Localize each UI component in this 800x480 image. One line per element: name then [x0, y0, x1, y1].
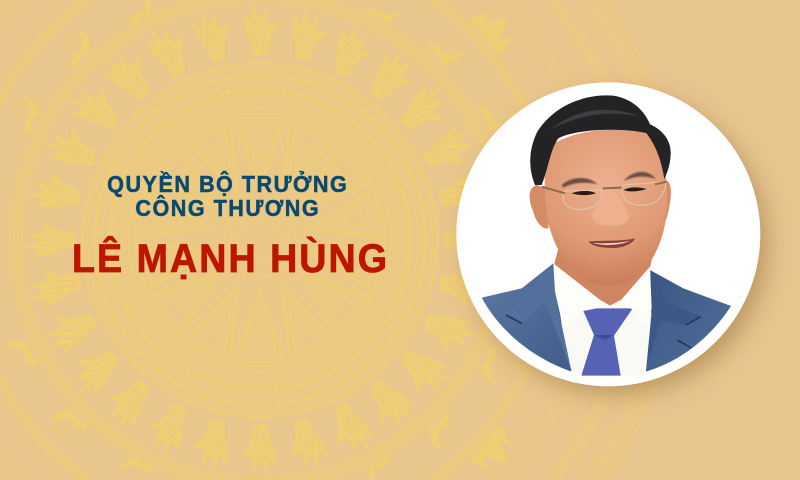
heading: person name: LÊ MẠNH HÙNG [72, 236, 387, 281]
mouth [588, 238, 635, 248]
collar [553, 263, 652, 328]
heading: position title: QUYỀN BỘ TRƯỞNG [107, 171, 347, 197]
hair highlight [550, 110, 640, 130]
portrait photo [456, 82, 760, 386]
portrait circle shadow [467, 94, 767, 394]
hair [530, 95, 671, 185]
tie [581, 308, 633, 376]
face [545, 129, 667, 286]
heading: position title: CÔNG THƯƠNG [135, 195, 319, 221]
heading: position title [107, 171, 347, 221]
shirt [553, 263, 651, 376]
glasses [542, 182, 667, 209]
eyes [572, 187, 647, 195]
suit jacket [482, 263, 731, 372]
bronze drum pattern [0, 0, 521, 480]
facial features [562, 172, 656, 226]
ears [530, 180, 671, 232]
neck [554, 242, 655, 306]
white circular frame [456, 82, 760, 386]
